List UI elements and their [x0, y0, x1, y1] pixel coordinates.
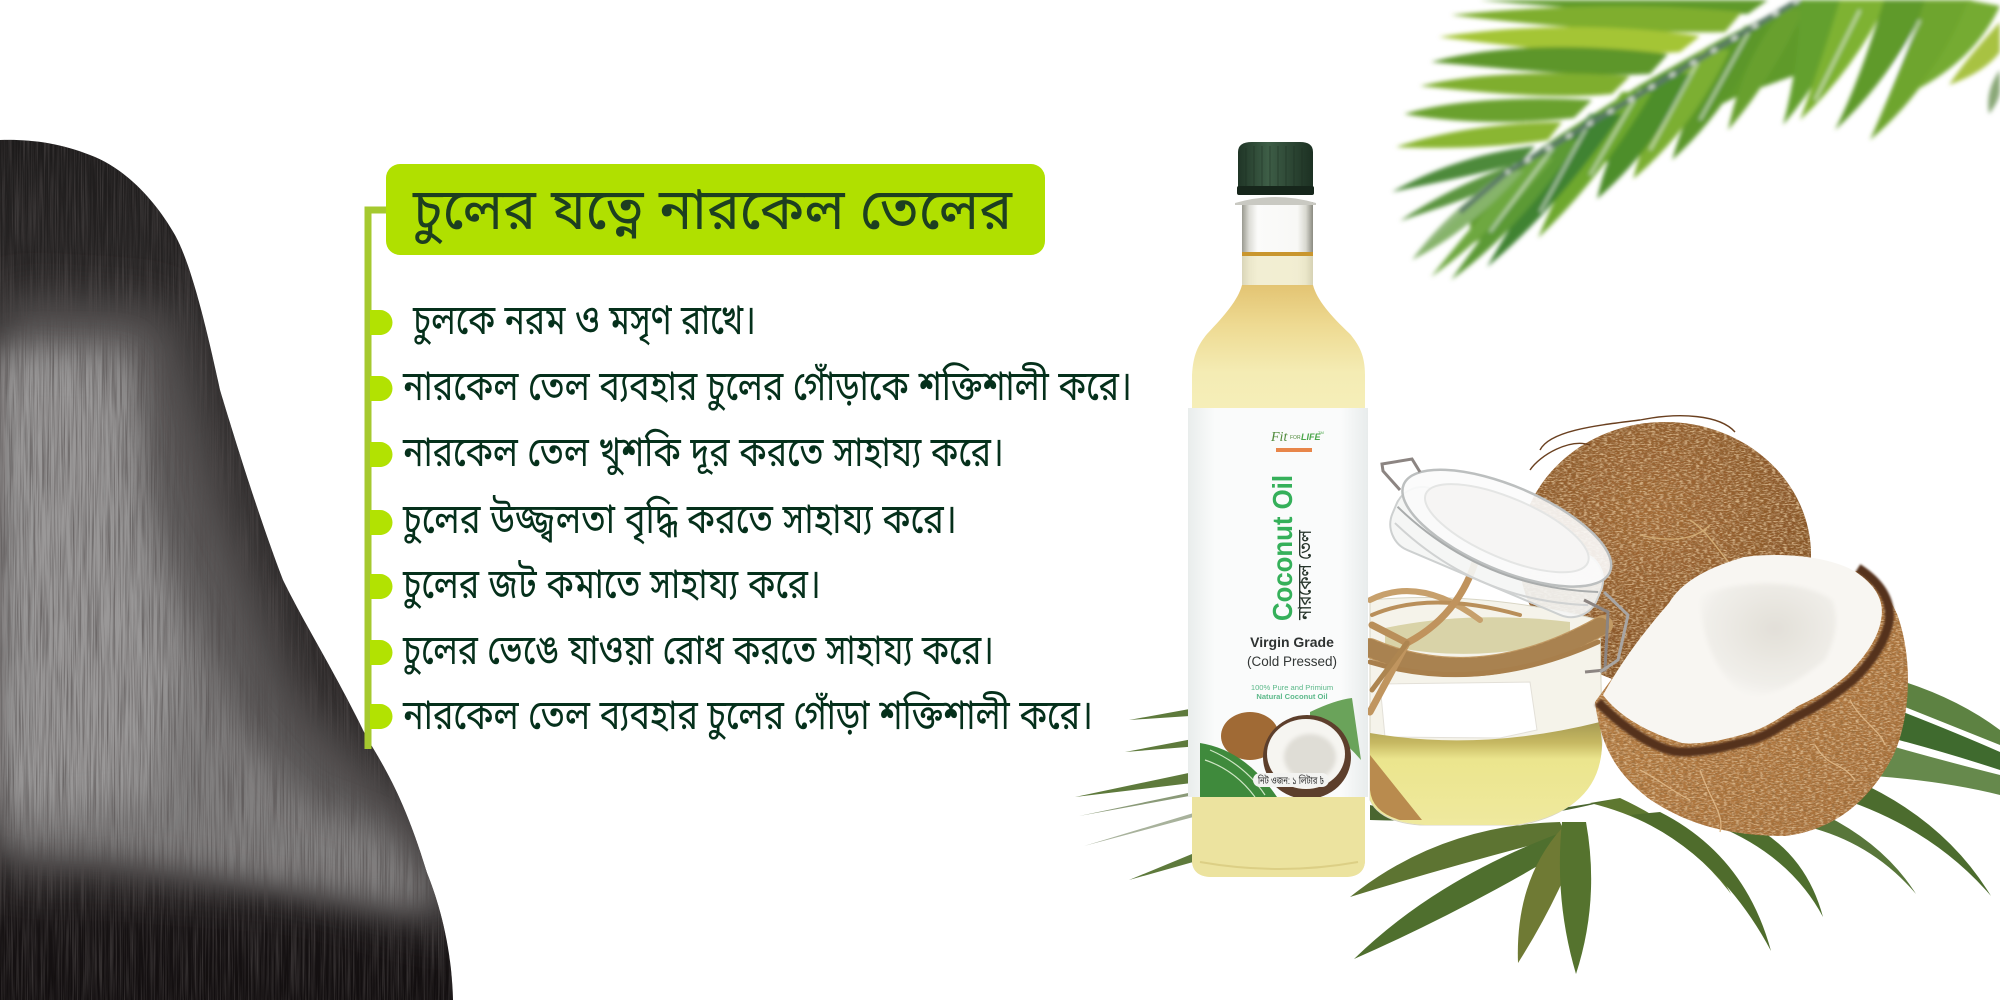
- lid: [1381, 446, 1626, 626]
- grade text: Natural Coconut Oil: [1256, 692, 1328, 701]
- grade text: Virgin Grade: [1250, 634, 1334, 650]
- coconut cavity: [1700, 584, 1836, 696]
- jar body: [1370, 598, 1602, 825]
- whole coconut: [1519, 416, 1811, 688]
- bullet item 7: নারকেল তেল ব্যবহার চুলের গোঁড়া শক্তিশালী করে।: [402, 691, 1093, 741]
- grade text: [1247, 634, 1337, 701]
- list connector line: [368, 210, 390, 749]
- brand logo: LIFE: [1301, 432, 1321, 442]
- bullet item 5: চুলের জট কমাতে সাহায্য করে।: [402, 560, 821, 610]
- half coconut: [1595, 555, 1908, 836]
- product label: [1188, 408, 1368, 799]
- white block: [1380, 682, 1537, 738]
- benefits list: [370, 296, 1132, 741]
- grade text: 100% Pure and Primium: [1251, 683, 1333, 692]
- shell fibres: [1640, 700, 1885, 832]
- bullet item 4: চুলের উজ্জ্বলতা বৃদ্ধি করতে সাহায্য করে।: [402, 495, 957, 545]
- bullet item 2: নারকেল তেল ব্যবহার চুলের গোঁড়াকে শক্তিশালী করে।: [402, 362, 1132, 412]
- title banner: চুলের যত্নে নারকেল তেলের: [412, 177, 1013, 245]
- hair illustration: [0, 130, 470, 1000]
- bottle cap: [1235, 142, 1316, 205]
- brand logo: Fit: [1270, 430, 1288, 445]
- palm leaves under coconuts: [1075, 682, 2000, 974]
- title banner: [386, 164, 1045, 255]
- brand logo: [1270, 430, 1324, 452]
- oil: [1370, 722, 1602, 825]
- label art: নিট ওজন: ১ লিটার ৳: [1257, 775, 1324, 787]
- bottle glass and oil: [1190, 200, 1368, 883]
- coconut flesh: [1603, 555, 1882, 743]
- wire clasp: [1382, 459, 1628, 672]
- brand logo: FOR: [1290, 435, 1301, 441]
- glass jar with oil: [1370, 446, 1628, 825]
- label art: [1200, 698, 1361, 799]
- bullet item 1: চুলকে নরম ও মসৃণ রাখে।: [412, 296, 756, 346]
- decorative palm leaf top right: [1392, 0, 2000, 280]
- glass neck tint: [1385, 617, 1570, 654]
- coconut oil bottle: [1188, 142, 1368, 883]
- bullet item 1: [370, 296, 756, 346]
- rope on neck: [1370, 533, 1603, 712]
- bullet item 6: চুলের ভেঙে যাওয়া রোধ করতে সাহায্য করে।: [402, 626, 994, 676]
- dark rim: [1598, 568, 1889, 752]
- coconut oil product name: Coconut Oil: [1267, 475, 1298, 621]
- grade text: (Cold Pressed): [1247, 654, 1337, 669]
- wood wedge inside jar: [1370, 755, 1422, 820]
- bengali product name: নারকেল তেল: [1295, 529, 1316, 621]
- brand logo: TM: [1318, 430, 1324, 435]
- bullet item 3: নারকেল তেল খুশকি দূর করতে সাহায্য করে।: [402, 428, 1004, 476]
